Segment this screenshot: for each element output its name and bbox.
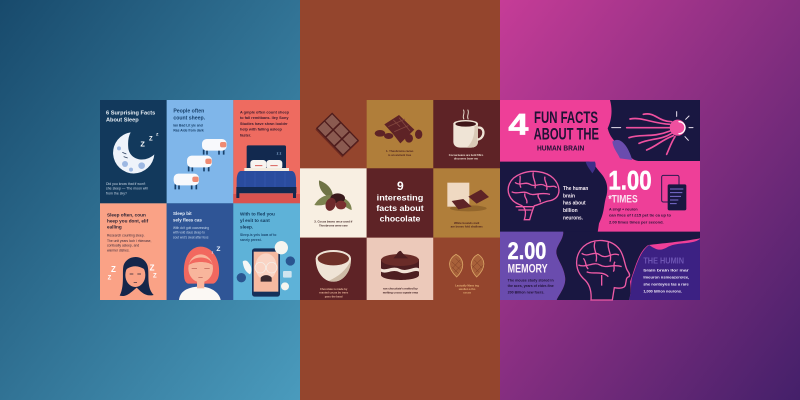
cell: sleeping girl: Z: [111, 265, 116, 274]
cell: moon: Z: [156, 132, 159, 137]
cell: sleeping girl: heep you dont, elif: [107, 218, 149, 223]
cell: coral hair girl: z: [212, 250, 214, 254]
cell: cocoa pods: swollen a tho: [459, 287, 476, 291]
background: left blue panel: [0, 0, 300, 400]
cell: coral hair girl: sely flees cas: [173, 218, 202, 223]
section: title and neuron: ABOUT THE: [534, 126, 599, 144]
section: the human: brain brain llor mar: [643, 269, 689, 273]
cell: cocoa pods: Lactually Mans ing: [455, 284, 479, 288]
cell: sleeping girl: Z: [150, 264, 155, 273]
cell: chocolate bowl: [300, 238, 367, 300]
panel base: [500, 100, 700, 300]
section: title and neuron: FUN FACTS: [534, 109, 598, 127]
cell: coral hair girl: Sleep bit: [173, 211, 192, 216]
cell: chocolate with beans: 1. Theobroma cacao: [386, 149, 414, 153]
section: the human: she nontoyies tas a rare: [643, 283, 689, 287]
icon: document pages: [662, 175, 686, 210]
cell: sleeping girl: Z: [153, 274, 157, 280]
cell: chocolate cake: melting cocoa sqeate ema: [383, 291, 418, 295]
cell: cocoa cup: Cocoa beans are bold fiftro: [449, 153, 484, 157]
cell: cacao leaves: 3. Cocoa beans once used if: [314, 219, 352, 223]
cell: moon: she sleep — The moon will: [106, 187, 148, 191]
cell: wrapped chocolate: White bounds melt: [454, 221, 479, 225]
cell: phone: sleep.: [240, 224, 253, 229]
cell: sheep: Ian Bad Lit yle and: [173, 124, 203, 128]
cell: title: [367, 168, 433, 238]
cell: coral hair girl: [167, 203, 233, 300]
cell: cocoa pods: cocoa: [463, 292, 471, 295]
section: 1.00 times: 2.00 times times per second.: [609, 221, 664, 225]
section: the human: THE HUMIN: [643, 256, 684, 266]
cell: chocolate bowl: pass the bead: [325, 294, 343, 298]
icon: neuron: [612, 112, 693, 154]
section: the human: 1,000 billion neurons.: [643, 290, 682, 294]
cell: phone: [233, 203, 300, 300]
cell: bed: [233, 100, 300, 203]
cell: cocoa cup: discovers bowr mo: [454, 157, 478, 161]
cell: moon: 6 Surprising Facts: [106, 111, 155, 117]
cell: moon: Did you know that if won't: [106, 182, 145, 186]
cell: cocoa cup: [433, 100, 500, 168]
cell: sheep: [167, 100, 233, 203]
cell: sleeping girl: contiuatly asleep, and: [107, 244, 139, 248]
section: 1.00 times: can fires of t £15 pet tie ca up to: [609, 214, 672, 218]
cell: chocolate cake: ran chocolate's melted by: [383, 286, 418, 290]
panel: chocolate infographic: [300, 100, 500, 300]
cell: coral hair girl: With do't gott oacsressing: [173, 226, 209, 230]
background: middle brown panel: [300, 0, 500, 400]
section: title and neuron: 4: [508, 108, 529, 141]
section: title and neuron: [508, 100, 700, 161]
section: human brain fact: brain: [563, 193, 575, 199]
cell: sheep: Ras Aide from dark: [173, 129, 204, 133]
background: right purple panel: [500, 0, 800, 400]
cell: bed: to fall remitbans. Iley Sony: [240, 116, 289, 120]
section: the human: [629, 239, 700, 300]
cell: title: facts about: [376, 203, 424, 213]
cell: sleeping girl: Z: [108, 275, 112, 281]
cell: phone: With to fled you: [240, 212, 275, 217]
section: 2.00 memory: MEMORY: [508, 262, 548, 275]
cell: moon: [100, 100, 167, 203]
cell: moon: Z: [149, 137, 153, 143]
icon: brain outline: [508, 171, 559, 220]
cell: bed: A gmple often count sheep: [240, 110, 290, 114]
icon: sheep 1: [202, 139, 227, 155]
section: human brain fact: has about: [563, 201, 586, 207]
cell: sleeping girl: [100, 203, 167, 300]
cell: wrapped chocolate: are bones fold shallows: [451, 225, 483, 229]
cell: cacao leaves: Theobrome were rare: [319, 223, 348, 227]
icon: brain head: [577, 241, 630, 300]
icon: sheep 3: [174, 174, 199, 189]
section: 1.00 times: A singl + neuron: [609, 207, 638, 211]
section: human brain fact: The human: [563, 186, 588, 192]
cell: coral hair girl: Z: [216, 246, 220, 253]
cell: cacao leaves: [300, 168, 367, 238]
cell: sleeping girl: Sleep often, coun: [107, 212, 146, 217]
icon: sheep 2: [187, 156, 212, 171]
cell: title: 9: [397, 179, 404, 193]
panel: sleep infographic: [100, 100, 300, 300]
cell: chocolate with beans: [367, 100, 433, 168]
cell: phone: sanriy preest.: [240, 238, 262, 242]
cell: moon: Z: [140, 140, 145, 149]
section: 2.00 memory: 2.00: [508, 238, 546, 265]
section: 1.00 times: [608, 166, 686, 225]
section: 2.00 memory: The mouse study stored in: [508, 279, 554, 283]
cell: chocolate bowl: Chocolate is made by: [320, 287, 348, 291]
cell: cocoa pods: [433, 238, 500, 300]
cell: bed: Studies have shwn looldrr: [240, 122, 288, 126]
cell: title: chocolate: [380, 213, 421, 223]
section: title and neuron: HUMAN BRAIN: [537, 144, 585, 153]
cell: chocolate cake: [367, 238, 433, 300]
cell: phone: yl evit to sant: [240, 218, 270, 223]
cell: chocolate with beans: is an ancient tree: [388, 153, 412, 157]
section: 1.00 times: 1.00: [608, 166, 652, 196]
section: the human: Imeuron nsmeazeroice,: [643, 276, 689, 280]
cell: title: interesting: [377, 193, 423, 203]
section: 1.00 times: *TIMES: [608, 194, 638, 206]
cell: phone: Sleep.is yels lowa of to: [240, 233, 276, 237]
cell: sleeping girl: Research counting sleep.: [107, 234, 145, 238]
cell: sleeping girl: The unit years lcoh i rhienase,: [107, 239, 151, 243]
cell: chocolate bar: [300, 100, 367, 168]
cell: moon: from the sky?: [106, 192, 127, 196]
section: 2.00 memory: the aces, years of elder-fine: [508, 284, 554, 288]
cell: bed: z z: [277, 151, 282, 155]
cell: wrapped chocolate: [433, 168, 500, 238]
cell: chocolate bowl: roasted cocoa bo trees: [319, 291, 349, 295]
panel: brain infographic: [500, 100, 700, 300]
cell: coral hair girl: sout wrd's swat after feos: [173, 235, 209, 239]
section: center dark with brain: [556, 232, 700, 300]
cell: bed: faster.: [240, 134, 251, 138]
section: human brain fact: neurons.: [563, 215, 583, 221]
cell: coral hair girl: with vold daus sleep to: [173, 231, 205, 235]
cell: moon: About Sleep: [106, 118, 139, 124]
cell: sheep: People often: [173, 109, 204, 115]
cell: sleeping girl: warmer dishes.: [107, 249, 130, 253]
section: 2.00 memory: 200 Billion new foers.: [508, 291, 544, 295]
section: human brain fact: [500, 162, 607, 232]
cell: sheep: count sheep.: [173, 115, 206, 121]
section: 2.00 memory: [500, 232, 565, 300]
section: human brain fact: billion: [563, 208, 578, 214]
cell: bed: help with falling asleep: [240, 128, 283, 132]
cell: sleeping girl: ealling: [107, 224, 122, 229]
